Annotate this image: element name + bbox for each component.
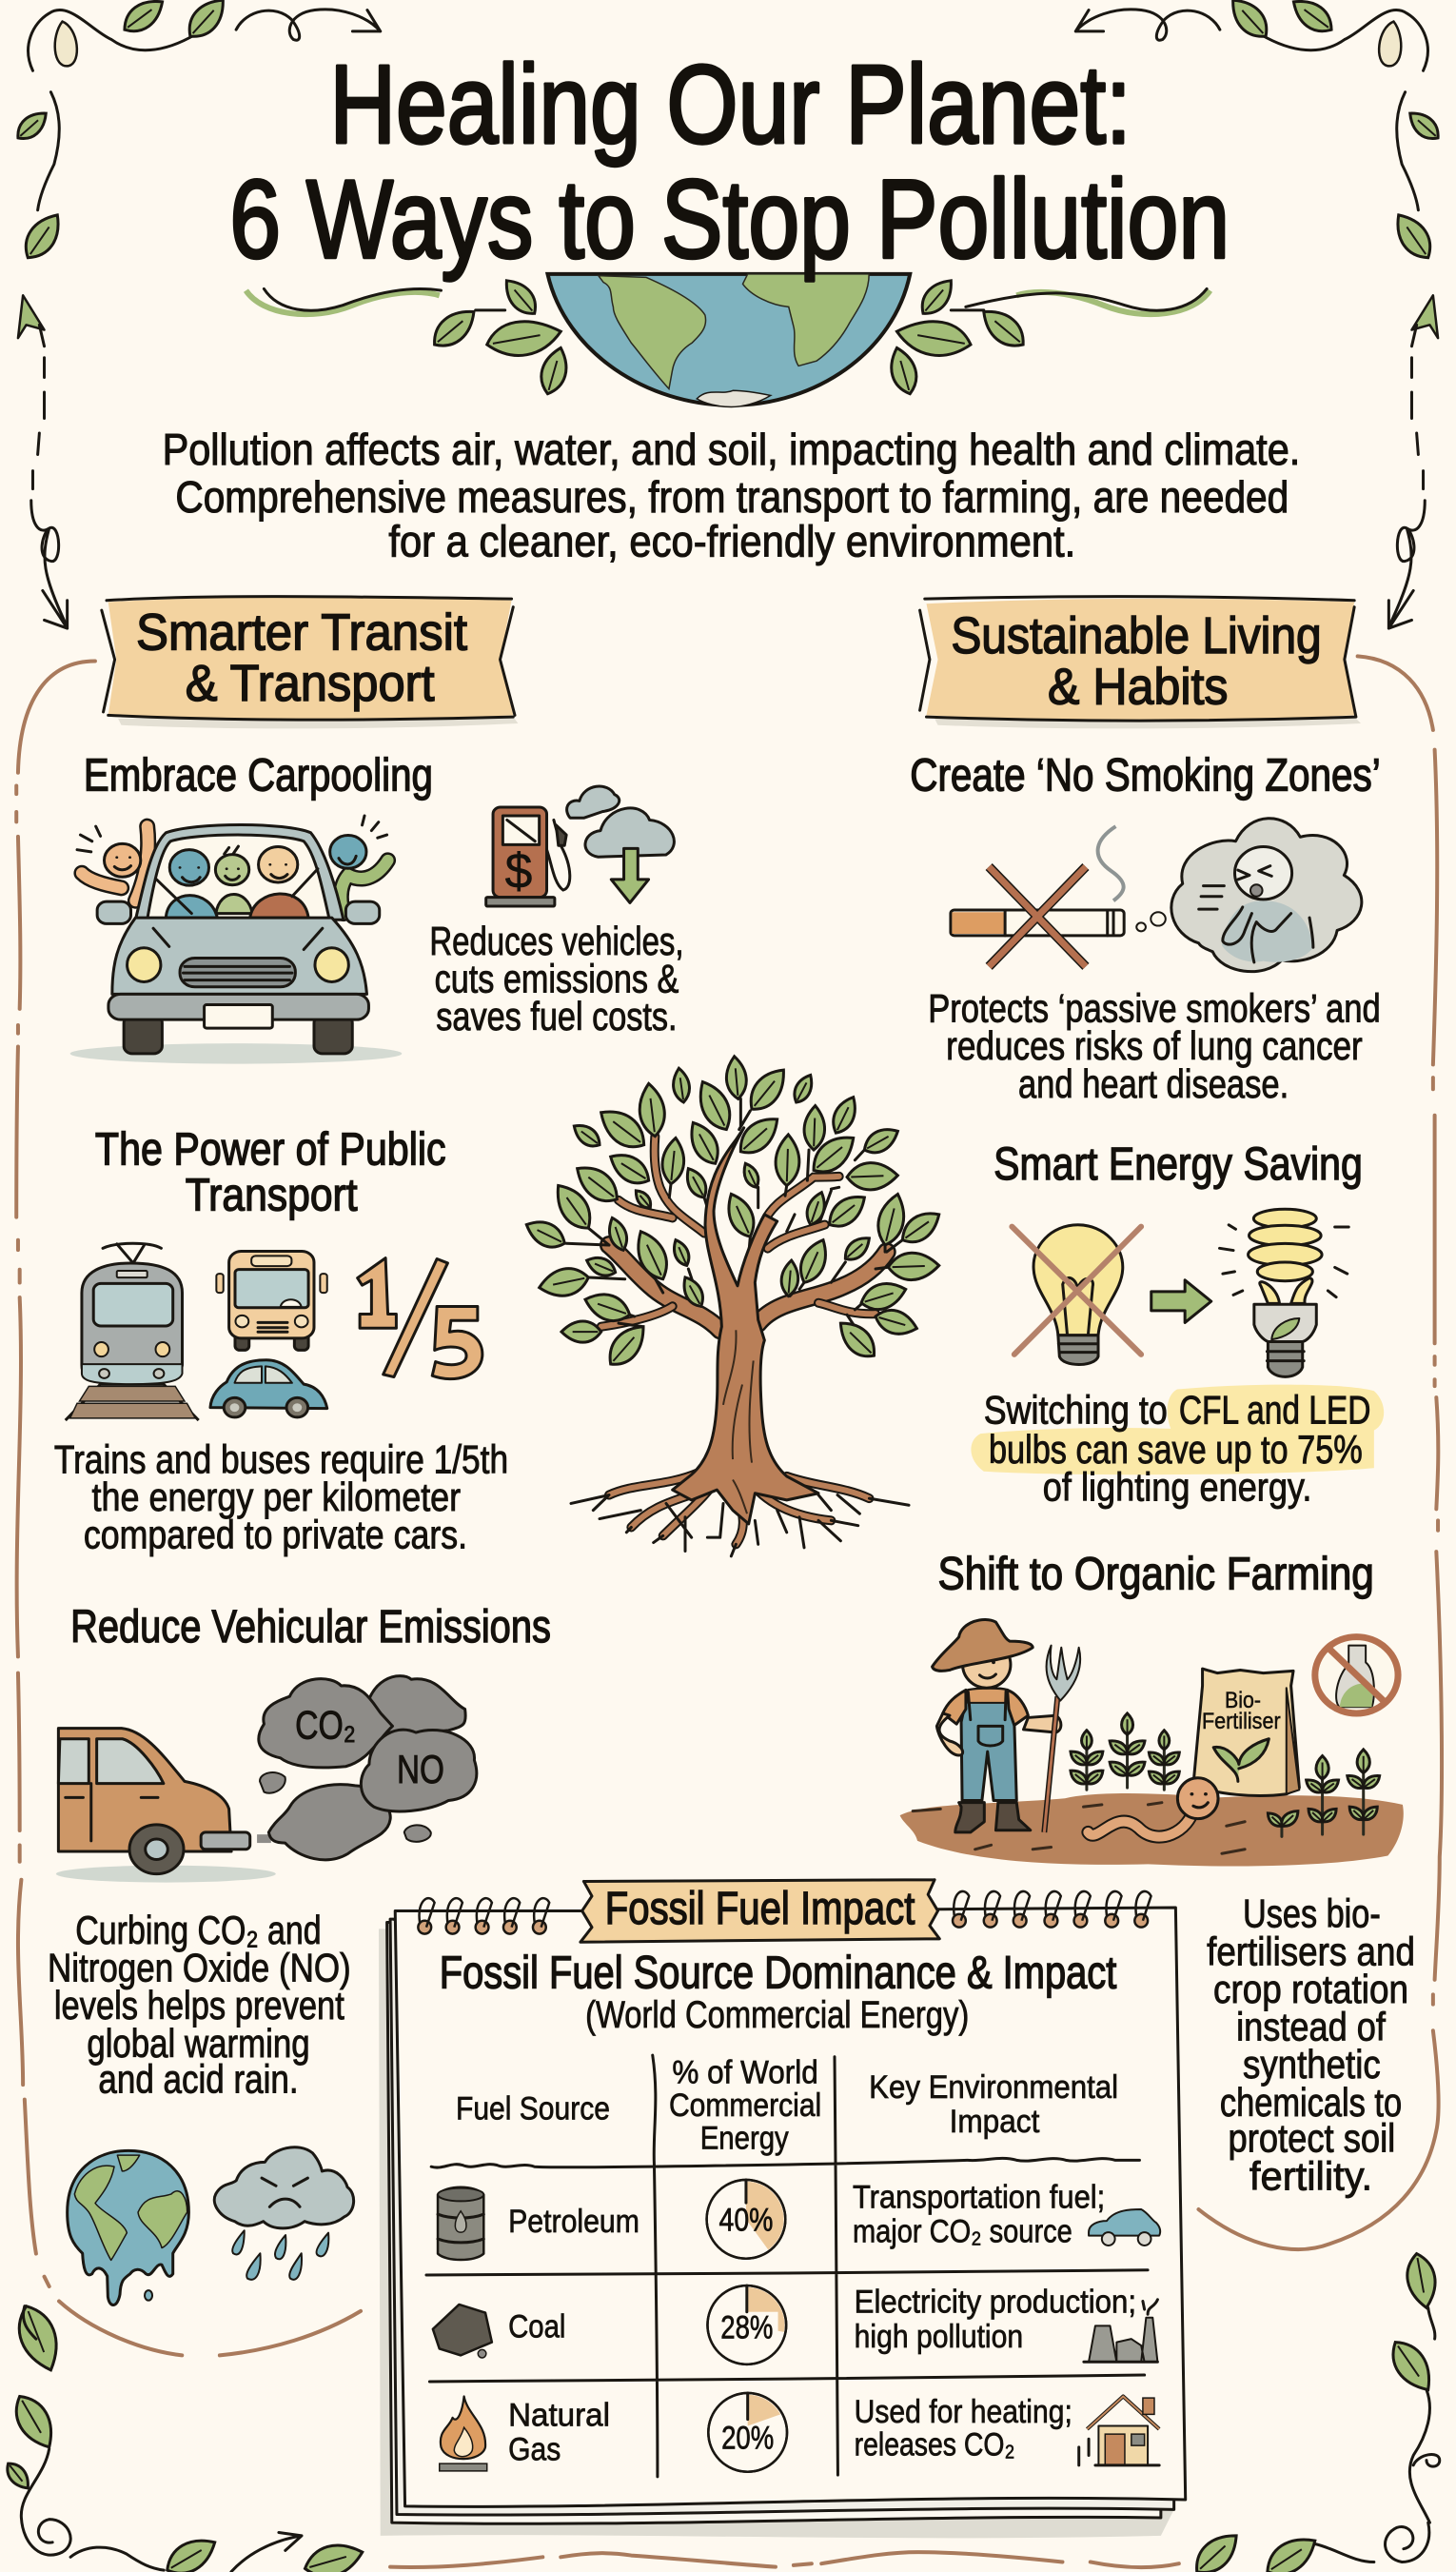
table title: (World Commercial Energy)	[585, 1994, 969, 2036]
table title: Fossil Fuel Source Dominance & Impact	[440, 1947, 1117, 1998]
icon: small blue car	[210, 1360, 327, 1417]
table header: Energy	[700, 2120, 789, 2156]
leaf	[1384, 2334, 1440, 2398]
description with highlight: Switching to	[984, 1389, 1168, 1433]
icon: crossed-out cigarette	[951, 826, 1166, 966]
impact text: Electricity production;	[855, 2285, 1136, 2321]
icon: farm scene	[900, 1619, 1404, 1867]
bottom leaf	[1188, 2526, 1246, 2572]
panel: fossil fuel impact notebook	[379, 1880, 1186, 2538]
right bracket line	[1198, 656, 1442, 2249]
description: crop rotation	[1213, 1968, 1408, 2011]
left garland vine	[246, 290, 440, 314]
label: Petroleum	[508, 2204, 639, 2240]
intro text: Comprehensive measures, from transport to farming, are needed	[175, 472, 1289, 522]
highlight	[971, 1385, 1384, 1474]
icon: train	[66, 1243, 199, 1420]
table header: Fuel Source	[456, 2090, 610, 2127]
side vine	[38, 92, 59, 210]
notebook sheets	[379, 1908, 1186, 2538]
vine and spiral	[29, 10, 195, 70]
continent: south america	[599, 276, 706, 389]
icon: old bulb crossed out	[1012, 1225, 1141, 1364]
globe leaf	[915, 274, 959, 321]
icon: coughing person in smoke	[1171, 819, 1362, 972]
bag label	[1202, 1688, 1281, 1734]
bag label: Bio-	[1225, 1688, 1261, 1713]
row: coal	[433, 2285, 1157, 2364]
section: reduce vehicular emissions	[48, 1601, 551, 2305]
row: petroleum	[438, 2179, 1160, 2260]
notebook spiral rings	[418, 1891, 1151, 1934]
soil marks	[913, 1803, 1245, 1853]
icon: orange car with exhaust	[56, 1676, 477, 1883]
impact text	[855, 2285, 1136, 2355]
impact text: Used for heating;	[855, 2394, 1072, 2430]
icon: factory	[1084, 2300, 1157, 2362]
section: shift to organic farming	[900, 1549, 1415, 2198]
description	[54, 1437, 508, 1557]
continent: africa	[743, 274, 869, 366]
impact text: Transportation fuel;	[853, 2179, 1105, 2215]
heading: Shift to Organic Farming	[938, 1549, 1374, 1600]
table header: Key Environmental	[869, 2069, 1118, 2106]
corner leaf	[181, 0, 232, 45]
tree roots and branches	[566, 1098, 909, 1556]
table header	[456, 2054, 1118, 2156]
panel: sustainable living and habits	[900, 597, 1442, 2249]
tree leaves	[522, 1056, 945, 1373]
banner: smarter transit and transport: & Transport	[186, 656, 435, 712]
description: Reduces vehicles,	[429, 920, 683, 963]
vine and spiral	[1386, 2307, 1440, 2562]
description: fertilisers and	[1207, 1929, 1415, 1973]
farmer	[955, 1803, 1031, 1832]
label: Natural	[508, 2397, 610, 2433]
description: Curbing CO₂ and	[75, 1909, 322, 1952]
small leaf	[2, 2459, 34, 2493]
leaf	[7, 2389, 62, 2455]
leaf stems	[476, 308, 984, 311]
icon: one fifth fraction	[358, 1258, 482, 1379]
description: cuts emissions &	[435, 958, 679, 1001]
table header: % of World	[672, 2054, 818, 2090]
banner: sustainable living and habits	[920, 597, 1361, 728]
icon: fuel pump and cloud	[486, 786, 674, 906]
cloud label: CO2: CO₂	[295, 1704, 356, 1748]
icon: oil barrel	[438, 2187, 483, 2260]
heading: The Power of Public	[95, 1123, 446, 1175]
description: chemicals to	[1220, 2081, 1402, 2125]
section: embrace carpooling	[70, 750, 683, 1064]
description: Protects ‘passive smokers’ and	[928, 987, 1381, 1031]
intro text: for a cleaner, eco-friendly environment.	[388, 516, 1075, 565]
decorative frame: top left corner	[12, 0, 381, 628]
right garland vine	[1016, 290, 1210, 314]
leaf	[10, 2300, 67, 2376]
description: Uses bio-	[1243, 1892, 1381, 1936]
heading: Smart Energy Saving	[994, 1138, 1363, 1190]
description: the energy per kilometer	[91, 1475, 461, 1519]
banner: sustainable living and habits: & Habits	[1048, 659, 1229, 715]
description: Nitrogen Oxide (NO)	[48, 1947, 351, 1990]
description: saves fuel costs.	[436, 995, 678, 1039]
section: the power of public transport	[54, 1123, 508, 1557]
title: 6 Ways to Stop Pollution	[229, 157, 1230, 282]
bottom arrow	[231, 2532, 302, 2572]
globe leaf	[537, 345, 572, 397]
description: levels helps prevent	[54, 1984, 344, 2028]
description: synthetic	[1243, 2043, 1381, 2087]
section: no smoking zones	[910, 750, 1381, 1106]
banner: sustainable living and habits: Sustainable Living	[951, 608, 1322, 664]
pie: 20 percent: 20%	[721, 2421, 774, 2457]
half earth	[547, 274, 910, 406]
heading	[95, 1123, 446, 1221]
plants	[1087, 1715, 1364, 1836]
description: reduces risks of lung cancer	[946, 1024, 1363, 1068]
bottom dashed divider	[390, 2552, 1179, 2567]
globe leaf	[426, 302, 482, 354]
dollar sign: $	[505, 842, 532, 898]
banner: fossil fuel impact: Fossil Fuel Impact	[605, 1883, 915, 1934]
soil	[900, 1793, 1404, 1867]
arrow dashes	[31, 325, 66, 623]
panel: smarter transit and transport	[16, 597, 683, 2355]
globe leaf	[482, 315, 566, 361]
corner leaf	[118, 0, 169, 39]
label: Gas	[508, 2432, 561, 2468]
description	[48, 1909, 351, 2102]
row: natural gas	[440, 2393, 1159, 2472]
description	[1207, 1892, 1415, 2198]
icon: melting earth	[68, 2150, 188, 2305]
green arrow head	[18, 295, 45, 338]
looped arrow	[236, 10, 381, 40]
description with highlight: of lighting energy.	[1043, 1466, 1311, 1510]
pie: 40 percent	[707, 2180, 785, 2259]
bottom leaf	[1260, 2529, 1323, 2572]
arrow head	[43, 590, 68, 628]
table title	[440, 1947, 1117, 2036]
globe leaves	[499, 274, 542, 321]
heading: Embrace Carpooling	[84, 750, 433, 801]
globe leaf	[891, 315, 976, 361]
banner: smarter transit and transport: Smarter Transit	[136, 604, 467, 661]
bottom leaf	[301, 2538, 366, 2572]
bio-fertiliser bag	[1193, 1669, 1299, 1796]
polar ice	[697, 390, 771, 406]
impact text: high pollution	[855, 2319, 1023, 2355]
side leaf	[12, 107, 52, 145]
description with highlight	[971, 1385, 1384, 1510]
impact text	[853, 2179, 1105, 2249]
description: and acid rain.	[98, 2058, 299, 2102]
title: Healing Our Planet:	[329, 42, 1131, 167]
pie: 28 percent: 28%	[720, 2309, 773, 2345]
icon: bus	[216, 1251, 327, 1350]
icon: carpool car	[70, 816, 402, 1064]
description: fertility.	[1249, 2154, 1372, 2198]
banner: smarter transit and transport	[102, 597, 518, 728]
pie: 40 percent: 40%	[719, 2202, 773, 2238]
table grid lines	[426, 2055, 1148, 2477]
icon: acid rain cloud	[214, 2147, 354, 2280]
description	[429, 920, 683, 1039]
label	[508, 2397, 610, 2468]
icon: small car	[1089, 2209, 1160, 2246]
description: global warming	[87, 2022, 310, 2066]
intro text	[163, 425, 1300, 565]
leaf	[1404, 2251, 1440, 2310]
description: Trains and buses require 1/5th	[54, 1437, 508, 1481]
globe illustration	[246, 274, 1210, 406]
impact text: releases CO₂	[855, 2426, 1015, 2463]
title	[229, 42, 1230, 282]
cloud label: NO: NO	[397, 1748, 444, 1791]
description with highlight: CFL and LED	[1179, 1389, 1370, 1433]
intro text: Pollution affects air, water, and soil, impacting health and climate.	[163, 425, 1300, 474]
icon: coal lump	[433, 2305, 492, 2358]
heading: Transport	[186, 1170, 358, 1221]
description: and heart disease.	[1018, 1062, 1289, 1106]
globe leaf	[886, 345, 921, 397]
icon: CFL bulb	[1219, 1209, 1348, 1376]
table header: Commercial	[669, 2087, 821, 2124]
central tree illustration	[522, 1056, 945, 1556]
description: compared to private cars.	[84, 1514, 467, 1557]
heading: Reduce Vehicular Emissions	[70, 1601, 551, 1652]
bottom leaf	[160, 2530, 222, 2572]
vine	[1315, 2544, 1374, 2562]
side leaf	[17, 208, 68, 265]
decorative frame: bottom left corner	[2, 2300, 366, 2572]
no chemicals sign	[1315, 1637, 1398, 1713]
left bracket line	[16, 662, 361, 2355]
icon: house	[1079, 2396, 1159, 2465]
decorative frame: top right corner	[1075, 0, 1444, 628]
pitchfork	[1044, 1696, 1057, 1832]
impact text	[855, 2394, 1072, 2463]
description with highlight: bulbs can save up to 75%	[989, 1428, 1363, 1472]
pie: 20 percent	[708, 2393, 787, 2472]
description	[928, 987, 1381, 1106]
label: Coal	[508, 2308, 565, 2344]
bag label: Fertiliser	[1202, 1709, 1281, 1734]
table header: Impact	[950, 2104, 1040, 2140]
icon: flame	[440, 2396, 487, 2471]
heading: Create ‘No Smoking Zones’	[910, 750, 1381, 801]
arrow: to efficient bulb	[1151, 1280, 1211, 1322]
worm	[1088, 1807, 1194, 1837]
impact text: major CO₂ source	[853, 2213, 1072, 2249]
description: protect soil	[1229, 2117, 1395, 2161]
pie: 28 percent	[707, 2285, 786, 2364]
vine and spiral	[21, 2306, 164, 2570]
spiral ornament	[55, 22, 77, 66]
globe leaf	[975, 302, 1032, 354]
description: instead of	[1236, 2006, 1386, 2049]
section: smart energy saving	[971, 1138, 1384, 1510]
decorative frame: bottom right corner	[1188, 2251, 1440, 2572]
